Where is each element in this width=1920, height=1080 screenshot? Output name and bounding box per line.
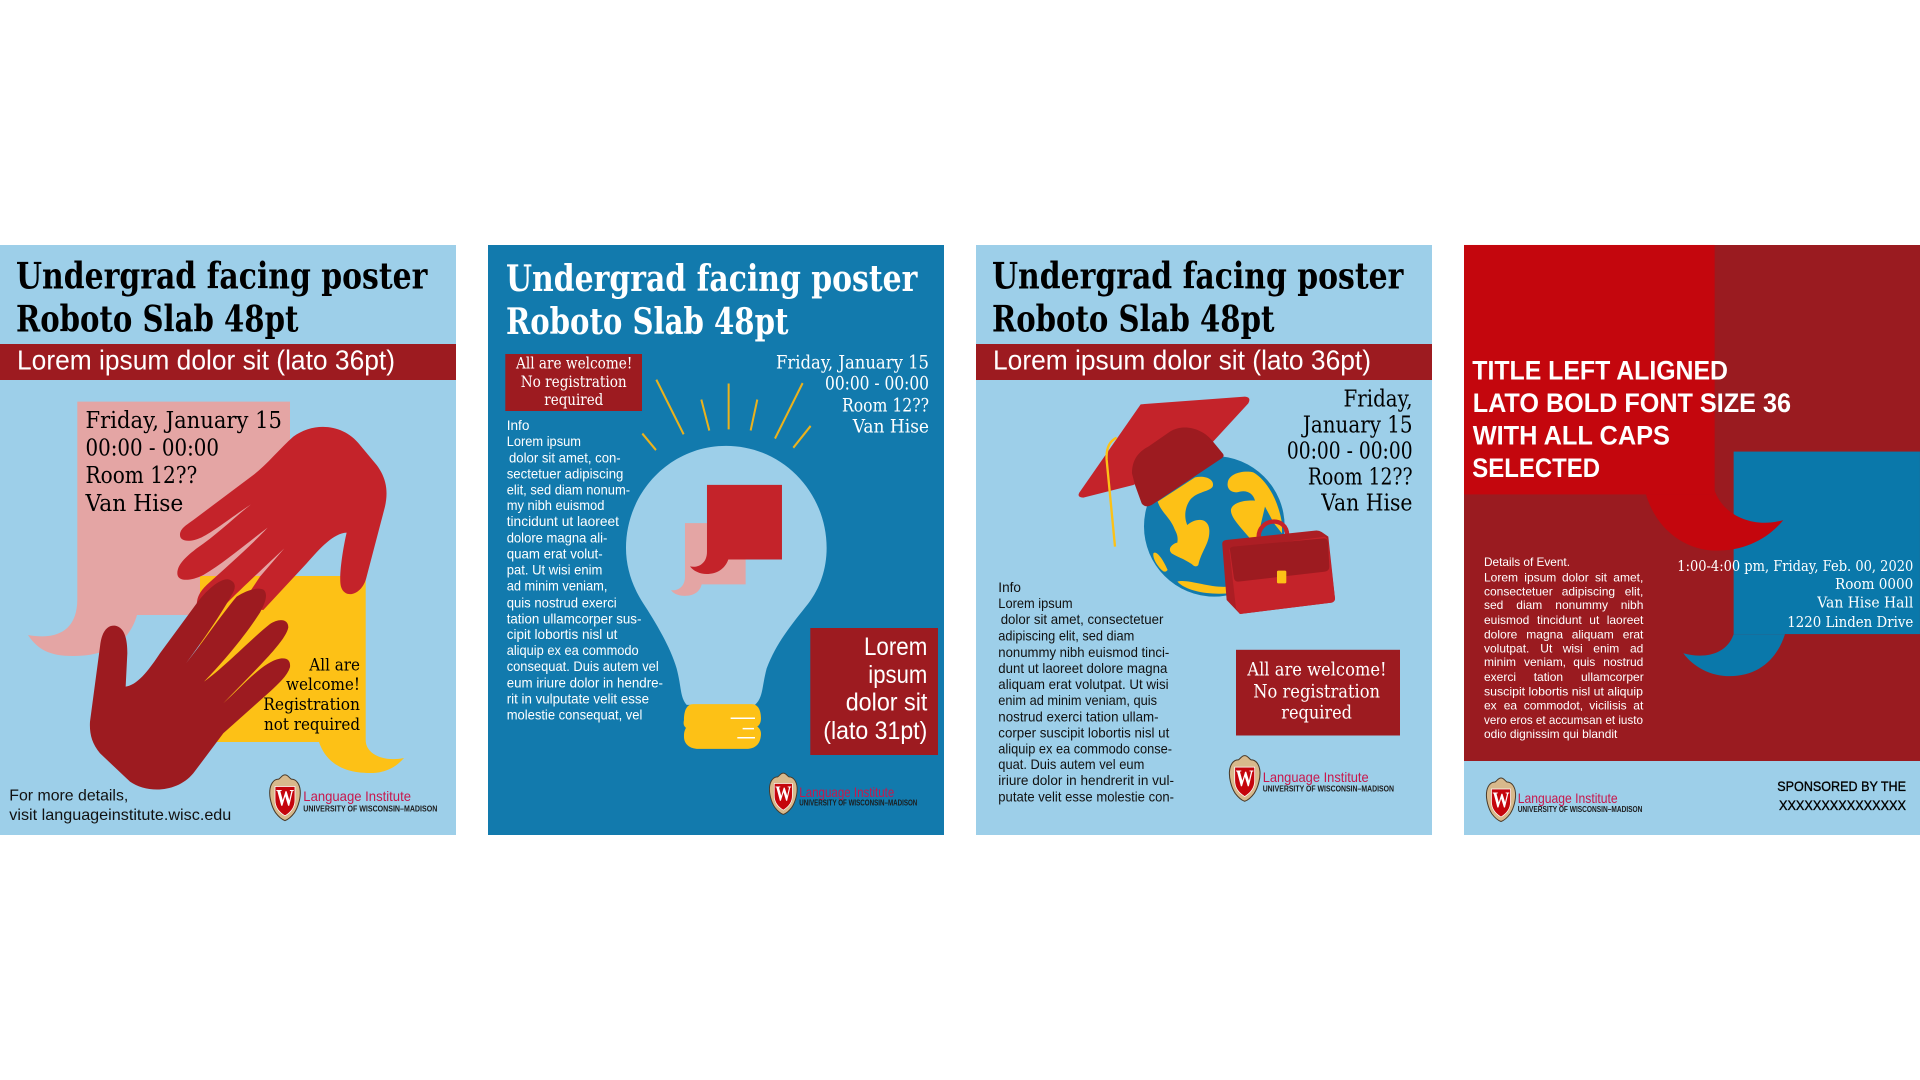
info text: aliquip ex ea commodo (507, 642, 639, 658)
info text: tincidunt ut laoreet (507, 513, 619, 529)
event description: vero eros et accumsan et iusto (1484, 713, 1643, 727)
subtitle band: Lorem ipsum dolor sit (lato 36pt) (17, 344, 395, 376)
event description: odio dignissim qui blandit (1484, 727, 1618, 741)
welcome box: All are welcome! (515, 354, 632, 372)
info text: Lorem ipsum (998, 595, 1073, 611)
logo: Language Institute: Language Institute (1518, 790, 1618, 806)
title: Roboto Slab 48pt (16, 299, 299, 341)
welcome box (1236, 650, 1400, 736)
welcome note: welcome! (286, 675, 360, 695)
event description (1484, 555, 1644, 741)
info text: cipit lobortis nisl ut (507, 626, 617, 642)
event details: January 15 (1301, 412, 1413, 438)
event details: Van Hise (85, 491, 183, 517)
event description: laoreet (1607, 613, 1644, 627)
lorem callout box: dolor sit (846, 689, 927, 717)
title: SELECTED (1472, 453, 1600, 483)
info text: aliquip ex ea commodo conse- (998, 740, 1172, 756)
title: WITH ALL CAPS (1473, 420, 1670, 450)
icon: dark red hand (90, 579, 290, 790)
info text: rit in vulputate velit esse (507, 690, 649, 706)
title (506, 258, 918, 343)
welcome note: All are (308, 655, 360, 675)
event description: ea (1504, 698, 1517, 712)
event description: nibh (1621, 598, 1643, 612)
info text: my nibh euismod (507, 497, 604, 513)
event description: sit (1595, 570, 1608, 584)
event details: 00:00 - 00:00 (86, 436, 219, 462)
panel: poster 1 helping hands (0, 245, 456, 835)
info text: nonummy nibh euismod tinci- (998, 644, 1170, 660)
info text: quis nostrud exerci (507, 594, 617, 610)
event details: Room 12?? (842, 396, 929, 417)
event description: ullamcorper (1581, 670, 1644, 684)
info text: sectetuer adipiscing (507, 465, 623, 481)
panel: poster 2 light bulb (488, 245, 944, 835)
logo: Language Institute (769, 773, 917, 814)
event description: consectetuer (1484, 584, 1553, 598)
title: TITLE LEFT ALIGNED (1472, 356, 1728, 386)
event description: vicilisis (1589, 698, 1627, 712)
event description: Details of Event. (1484, 555, 1570, 569)
event details: Van Hise Hall (1816, 594, 1913, 612)
logo: Language Institute: UNIVERSITY OF WISCONSIN–MADISON (303, 805, 437, 814)
icon: globe, graduation cap and briefcase (1079, 397, 1335, 614)
event description: volutpat. (1484, 641, 1529, 655)
more details link: For more details, (9, 788, 128, 804)
event details: Room 12?? (86, 463, 197, 489)
event description: tation (1534, 670, 1563, 684)
info text: eum iriure dolor in hendre- (507, 674, 663, 690)
welcome note (263, 655, 360, 735)
footer band (1464, 761, 1920, 835)
info text: adipiscing elit, sed diam (998, 628, 1134, 644)
event description: ut (1589, 613, 1600, 627)
title: Undergrad facing poster (16, 256, 428, 298)
welcome box: required (1281, 702, 1352, 724)
info text: consequat. Duis autem vel (507, 658, 659, 674)
event description: erat (1623, 627, 1644, 641)
event description: Lorem (1484, 570, 1518, 584)
event description: diam (1516, 598, 1542, 612)
event description: ex (1484, 698, 1497, 712)
event description: euismod (1484, 613, 1529, 627)
event description: aliquam (1572, 627, 1614, 641)
more details link (9, 788, 231, 824)
info text (998, 579, 1174, 804)
event description: adipiscing (1562, 584, 1615, 598)
event description: wisi (1562, 641, 1583, 655)
logo: Language Institute: W (276, 784, 294, 810)
event details: Van Hise (1320, 491, 1412, 517)
sponsor text: SPONSORED BY THE (1777, 778, 1906, 794)
event details: Friday, January 15 (86, 408, 282, 434)
event description: amet, (1613, 570, 1643, 584)
logo: Language Institute: UNIVERSITY OF WISCONSIN–MADISON (799, 798, 917, 808)
event description: nostrud (1603, 655, 1643, 669)
info text: dolor sit amet, consectetuer (1001, 611, 1164, 627)
event description: at (1633, 698, 1644, 712)
logo: Language Institute: Language Institute (303, 788, 411, 804)
event description: magna (1526, 627, 1563, 641)
yellow speech bubble (200, 576, 404, 773)
event details: Van Hise (852, 417, 929, 438)
sponsor text (1777, 778, 1907, 813)
lorem callout box: Lorem (864, 633, 927, 661)
logo: Language Institute (1229, 756, 1394, 801)
event description: dolore (1484, 627, 1518, 641)
event description: elit, (1625, 584, 1643, 598)
welcome box: required (544, 391, 603, 409)
logo: Language Institute: Language Institute (799, 784, 894, 800)
panel: poster 4 red and blue bubbles (1464, 245, 1920, 835)
welcome box: No registration (1253, 682, 1380, 702)
info text: tation ullamcorper sus- (507, 610, 642, 626)
title: Roboto Slab 48pt (506, 301, 789, 343)
event details (1287, 386, 1413, 517)
logo: Language Institute (270, 775, 437, 821)
logo: Language Institute (1486, 778, 1643, 822)
info text: pat. Ut wisi enim (507, 561, 602, 577)
event description: Ut (1540, 641, 1553, 655)
logo: Language Institute: UNIVERSITY OF WISCONSIN–MADISON (1263, 785, 1394, 794)
title (1472, 356, 1791, 483)
info text: quat. Duis autem vel eum (998, 756, 1144, 772)
event description: nonummy (1555, 598, 1608, 612)
event description: minim (1484, 655, 1516, 669)
info text: elit, sed diam nonum- (507, 481, 630, 497)
info text: Info (507, 417, 530, 433)
icon: red hand (177, 427, 387, 610)
event description: quis (1573, 655, 1595, 669)
event description: ad (1630, 641, 1643, 655)
more details link: visit languageinstitute.wisc.edu (9, 807, 231, 824)
logo: Language Institute: W (1236, 765, 1254, 791)
logo: Language Institute: UNIVERSITY OF WISCONSIN–MADISON (1518, 805, 1643, 814)
event description: dolor (1562, 570, 1589, 584)
sponsor text: XXXXXXXXXXXXXXX (1779, 797, 1907, 813)
event details: Room 0000 (1835, 575, 1913, 593)
event description: veniam, (1524, 655, 1566, 669)
title: Roboto Slab 48pt (992, 299, 1275, 341)
logo: Language Institute: W (1492, 787, 1510, 812)
title: Undergrad facing poster (506, 258, 918, 300)
info text: Lorem ipsum (507, 433, 581, 449)
info text: enim ad minim veniam, quis (998, 692, 1157, 708)
red and blue speech bubbles (1464, 245, 1920, 676)
welcome note: Registration (263, 695, 360, 715)
lorem callout box (810, 628, 938, 755)
event details (776, 352, 929, 438)
event details (85, 408, 282, 517)
event description: enim (1593, 641, 1619, 655)
event description: exerci (1484, 670, 1516, 684)
info text: nostrud exerci tation ullam- (998, 708, 1159, 724)
icon: light rays (642, 380, 811, 450)
logo: Language Institute: Language Institute (1263, 769, 1369, 785)
info text (507, 417, 663, 722)
event details: Room 12?? (1308, 464, 1413, 490)
subtitle band: Lorem ipsum dolor sit (lato 36pt) (993, 344, 1371, 376)
info text: putate velit esse molestie con- (998, 788, 1174, 804)
title: LATO BOLD FONT SIZE 36 (1473, 388, 1791, 418)
info text: iriure dolor in hendrerit in vul- (998, 772, 1174, 788)
welcome box: All are welcome! (1246, 660, 1387, 680)
info text: aliquam erat volutpat. Ut wisi (998, 676, 1169, 692)
info text: dolor sit amet, con- (509, 449, 621, 465)
welcome box (505, 354, 642, 411)
info text: corper suscipit lobortis nisl ut (998, 724, 1169, 740)
welcome note: not required (264, 715, 360, 735)
event details: Friday, (1344, 386, 1412, 412)
event details (1677, 557, 1913, 631)
event details: Friday, January 15 (776, 352, 929, 374)
info text: molestie consequat, vel (507, 706, 642, 722)
lorem callout box: ipsum (868, 661, 927, 689)
lorem callout box: (lato 31pt) (823, 717, 927, 745)
event description: commodot, (1524, 698, 1583, 712)
welcome box: No registration (521, 373, 627, 391)
event description: suscipit lobortis nisl ut aliquip (1484, 684, 1643, 698)
icon: light bulb (626, 446, 827, 749)
event description: sed (1484, 598, 1503, 612)
info text: quam erat volut- (507, 545, 603, 561)
info text: Info (998, 579, 1021, 595)
logo: Language Institute: W (775, 782, 791, 806)
event details: 00:00 - 00:00 (825, 374, 929, 394)
title (16, 256, 428, 341)
title: Undergrad facing poster (992, 256, 1404, 298)
info text: ad minim veniam, (507, 578, 607, 594)
event description: ipsum (1524, 570, 1556, 584)
info text: dolore magna ali- (507, 529, 608, 545)
event description: tincidunt (1537, 613, 1582, 627)
info text: dunt ut laoreet dolore magna (998, 660, 1167, 676)
pink speech bubble (28, 402, 290, 656)
title (992, 256, 1404, 341)
panel: poster 3 globe and cap (976, 245, 1432, 835)
event details: 00:00 - 00:00 (1287, 438, 1413, 464)
